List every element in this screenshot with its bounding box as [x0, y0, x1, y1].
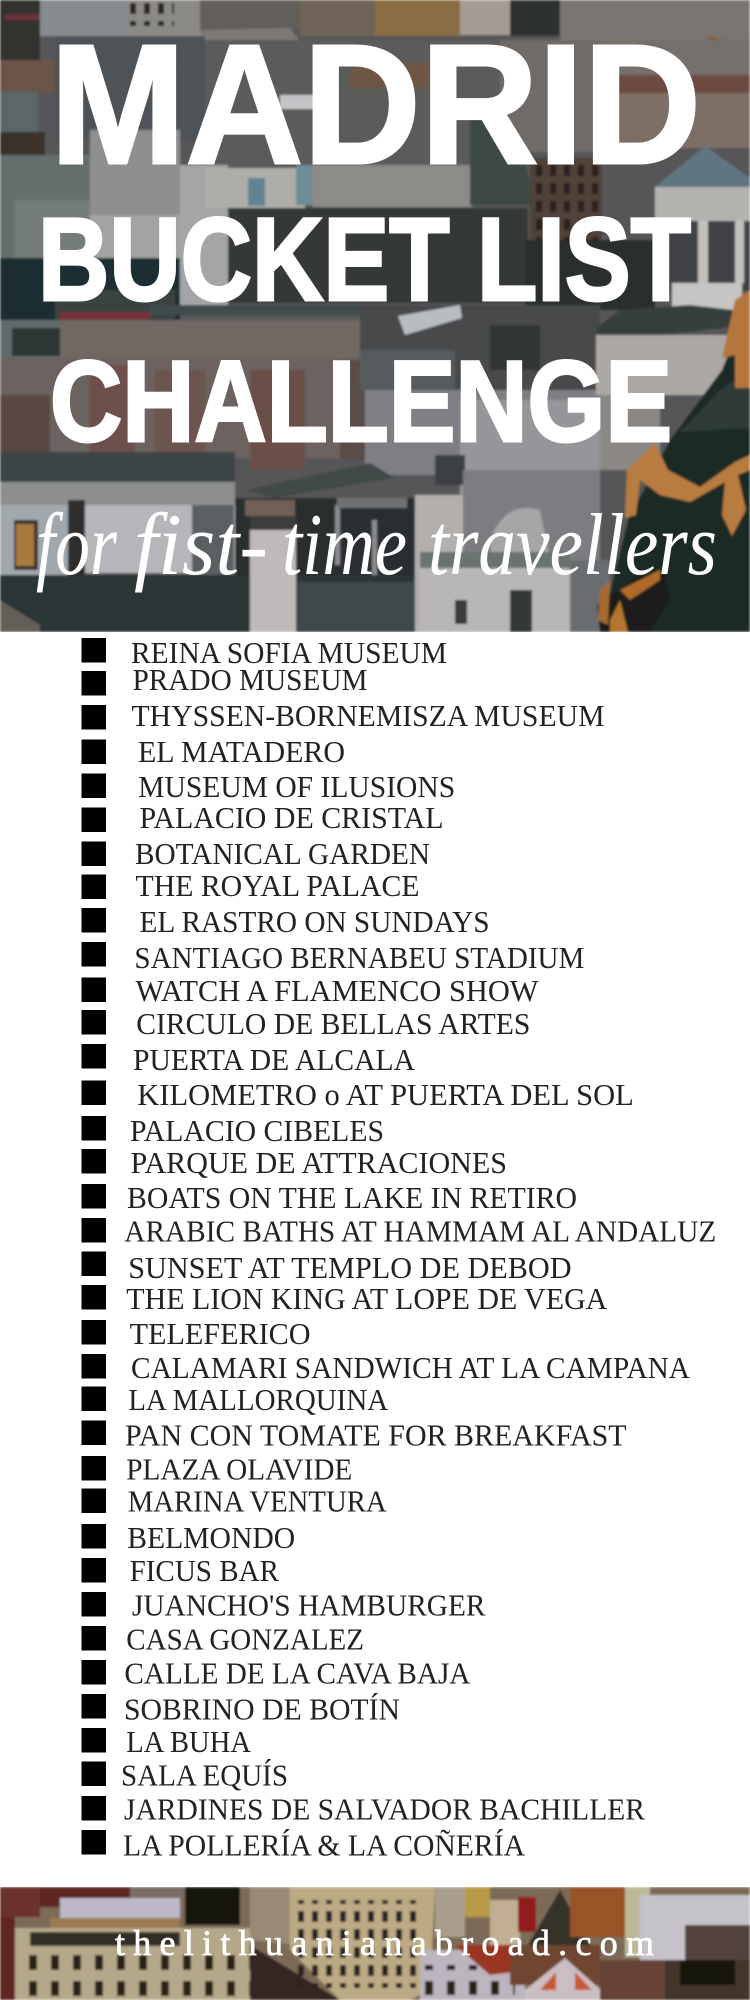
item: Boats on the Lake in Retiro: BOATS ON THE LAKE IN RETIRO	[127, 1180, 577, 1215]
item: Prado Museum: PRADO MUSEUM	[132, 662, 368, 697]
footer photo: Gran Via	[0, 1887, 750, 2000]
item: Belmondo: BELMONDO	[127, 1520, 295, 1555]
item: Jardines de Salvador Bachiller: JARDINES DE SALVADOR BACHILLER	[124, 1792, 645, 1826]
item: Botanical Garden: BOTANICAL GARDEN	[135, 836, 430, 871]
subtitle script: for	[36, 497, 118, 594]
item: Kilometro 0 at Puerta del Sol: KILOMETRO o AT PUERTA DEL SOL	[137, 1077, 634, 1112]
item: Pan con Tomate for Breakfast: PAN CON TOMATE FOR BREAKFAST	[125, 1418, 627, 1452]
subtitle script: time	[282, 497, 407, 594]
item: Museum of Ilusions: MUSEUM OF ILUSIONS	[138, 769, 455, 804]
item: Casa Gonzalez: CASA GONZALEZ	[126, 1622, 364, 1656]
item: Marina Ventura: MARINA VENTURA	[128, 1484, 387, 1518]
title block	[38, 10, 701, 466]
item: The Lion King at Lope de Vega: THE LION KING AT LOPE DE VEGA	[126, 1281, 608, 1316]
item: La Buha: LA BUHA	[126, 1724, 252, 1759]
item: La Buha	[82, 1724, 252, 1759]
subtitle script	[36, 497, 717, 594]
item: Juancho's Hamburger: JUANCHO'S HAMBURGER	[132, 1588, 486, 1622]
item: Teleferico: TELEFERICO	[130, 1316, 311, 1351]
title: MADRID: MADRID	[50, 10, 701, 200]
item: La Polleria and La Coneria: LA POLLERÍA & LA COÑERÍA	[123, 1828, 526, 1862]
item: Sala Equis: SALA EQUÍS	[121, 1758, 288, 1792]
checklist panel	[82, 635, 716, 1862]
item: Puerta de Alcala: PUERTA DE ALCALA	[133, 1042, 416, 1077]
item: Palacio Cibeles: PALACIO CIBELES	[130, 1113, 384, 1148]
item: Parque de Attraciones: PARQUE DE ATTRACIONES	[130, 1145, 507, 1180]
subtitle script: fist-	[134, 497, 268, 594]
item: La Mallorquina: LA MALLORQUINA	[128, 1382, 389, 1417]
hero photo: Madrid rooftops	[0, 0, 750, 632]
item: Ficus Bar: FICUS BAR	[130, 1553, 279, 1588]
item: The Royal Palace: THE ROYAL PALACE	[136, 868, 420, 903]
item: Palacio de Cristal: PALACIO DE CRISTAL	[140, 800, 444, 835]
item: Circulo de Bellas Artes: CIRCULO DE BELLAS ARTES	[136, 1006, 530, 1041]
title: CHALLENGE: CHALLENGE	[50, 338, 672, 466]
item: Reina Sofia Museum: REINA SOFIA MUSEUM	[131, 635, 447, 670]
footer website url: thelithuanianabroad.com	[115, 1923, 654, 1963]
item: Sobrino de Botin: SOBRINO DE BOTÍN	[124, 1692, 400, 1726]
item: Santiago Bernabeu Stadium: SANTIAGO BERNABEU STADIUM	[134, 940, 584, 975]
item: Thyssen-Bornemisza Museum: THYSSEN-BORNEMISZA MUSEUM	[132, 698, 604, 733]
item: Arabic Baths: ARABIC BATHS AT HAMMAM AL ANDALUZ	[124, 1214, 716, 1248]
item: El Rastro on Sundays: EL RASTRO ON SUNDAYS	[140, 904, 490, 939]
item: Calamari Sandwich at La Campana: CALAMARI SANDWICH AT LA CAMPANA	[131, 1350, 691, 1385]
item: Sunset at Templo de Debod: SUNSET AT TEMPLO DE DEBOD	[128, 1250, 572, 1285]
item: Plaza Olavide: PLAZA OLAVIDE	[126, 1452, 352, 1486]
item: Watch a Flamenco Show: WATCH A FLAMENCO SHOW	[136, 973, 539, 1008]
item: El Matadero: EL MATADERO	[138, 734, 345, 769]
item: Calle de la Cava Baja: CALLE DE LA CAVA BAJA	[124, 1656, 471, 1690]
